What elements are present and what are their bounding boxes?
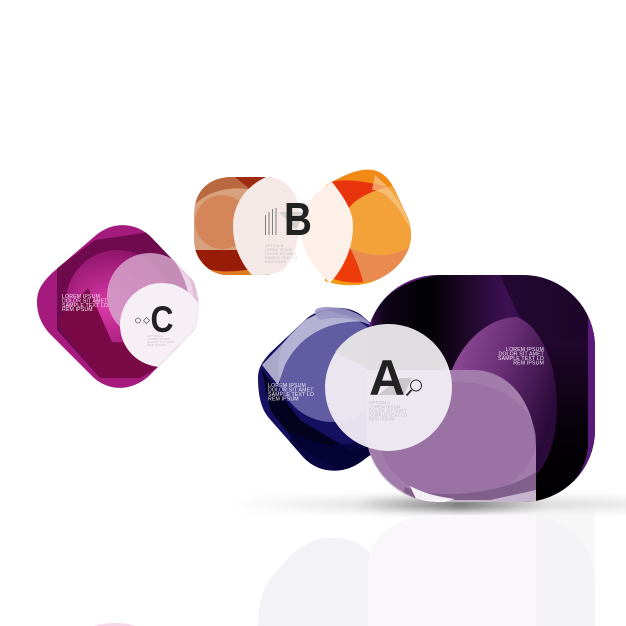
red crescent [330,180,388,208]
purple right rim [574,316,595,481]
option text C: REM IPSUM [147,343,166,347]
pale rounded pane [362,370,536,503]
pale circle [107,253,193,327]
label text: purple: SAMPLE TEXT LO [498,356,544,362]
dark bottom fill [290,430,370,470]
label text: purple: REM IPSUM [513,360,544,366]
right dark region [500,275,595,481]
option text A: OPTION A [369,400,390,405]
bright circle [66,250,144,342]
label text: magenta: LOREM IPSUM [62,294,100,300]
reflection of shapes [93,512,595,626]
panel: magenta shape [35,222,204,394]
label text: magenta: SAMPLE TEXT LO [62,303,108,309]
panel: brown shape [194,177,274,275]
label text: purple: LOREM IPSUM [506,347,544,353]
label text: blue: SAMPLE TEXT LO [268,392,314,398]
option text B: SAMPLE TEXT LO [265,256,298,260]
mid blob [278,316,368,422]
label text: magenta: REM IPSUM [62,307,93,313]
option text B: REM IPSUM [265,260,287,264]
option text A: LOREM IPSUM [369,404,401,410]
letter B: B [284,194,312,245]
option text B: OPTION B [265,244,284,248]
amber top band [325,170,393,187]
option text A: DOLOR SIT AMET [369,408,407,414]
circle C [136,300,175,347]
pale upper-left wedge [262,310,372,385]
label text: blue: DOLOR SIT AMET [268,388,314,394]
shadow glyph behind A [378,378,412,395]
dark lower band [262,370,370,470]
black lower right [530,362,592,502]
panel: blue shape [258,307,370,471]
option text B: DOLOR SIT AMET [265,252,298,256]
purple top-left rim [366,275,440,330]
red wedge [329,248,364,285]
circle A [325,324,452,451]
panel: purple shape [360,275,600,505]
option text C: LOREM IPSUM [147,337,171,341]
label text: blue: REM IPSUM [268,396,299,402]
option text B: LOREM IPSUM [265,248,292,252]
option text A: SAMPLE TEXT LO [369,412,408,418]
lighter blob [450,317,557,480]
option text A: REM IPSUM [369,416,395,422]
letter A: A [369,350,405,406]
label text: purple: DOLOR SIT AMET [498,352,545,358]
option text C: OPTION C [147,334,164,338]
label text: magenta: DOLOR SIT AMET [62,298,108,304]
icon: magnifier [406,380,422,396]
icon: circle and diamond [136,318,150,324]
lower right soft region [350,246,410,286]
panel: orange shape [325,170,412,286]
circle C disc [120,283,204,367]
icon: vertical bars [266,208,276,235]
floor shadow [230,498,626,511]
dark inner band [57,232,195,378]
label text: blue: LOREM IPSUM [268,383,306,389]
circle B [233,177,353,283]
lower maroon [58,288,180,378]
option text C: DOLOR SIT AMET [147,340,175,344]
letter C: C [150,300,173,341]
